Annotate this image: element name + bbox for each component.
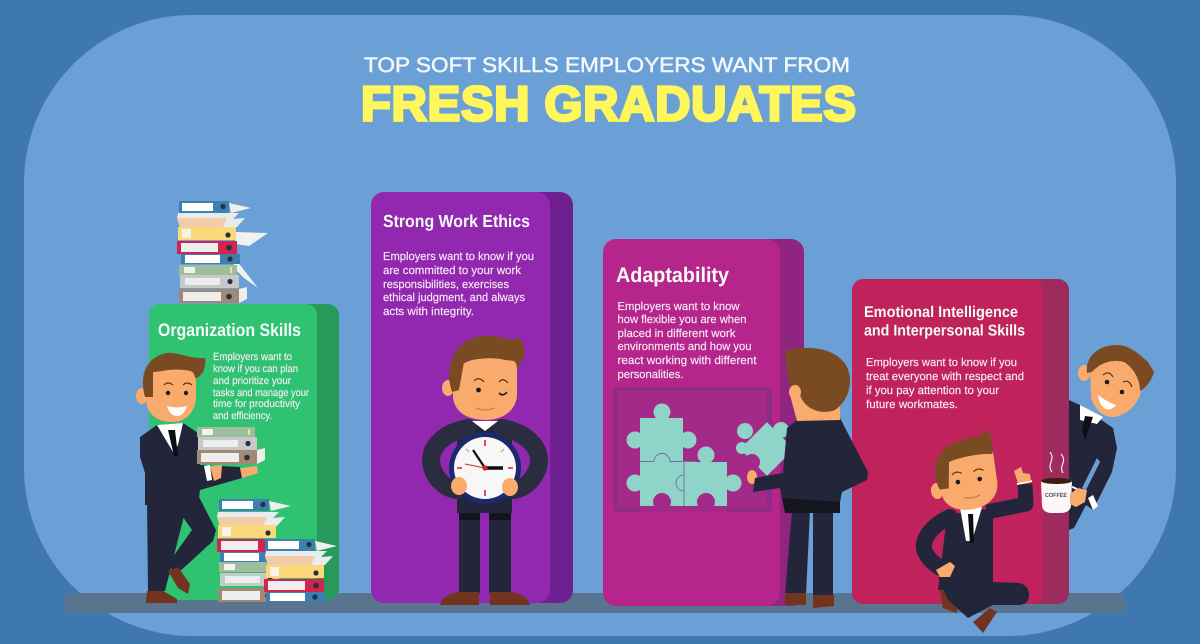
body text: react working with different	[618, 355, 757, 367]
icon: second floor binder stack	[264, 539, 337, 602]
icon: clock	[449, 432, 521, 504]
held binders	[197, 427, 265, 464]
icon: held puzzle piece	[736, 422, 794, 476]
panel front	[852, 279, 1043, 604]
body text: and prioritize your	[213, 375, 291, 387]
title	[361, 54, 856, 132]
body text: know if you can plan	[213, 363, 298, 375]
body text: and efficiency.	[213, 410, 272, 422]
heading: organization skills: Organization Skills	[158, 320, 301, 340]
ground shadow bar	[64, 593, 1126, 613]
body text: environments and how you	[618, 341, 752, 353]
man peeking from behind panel	[1069, 345, 1154, 530]
panel: emotional intelligence	[852, 279, 1069, 604]
panel side	[650, 239, 804, 606]
sitting man	[923, 428, 1087, 633]
heading: adaptability: Adaptability	[616, 264, 729, 287]
man holding clock	[431, 336, 539, 605]
body text	[213, 351, 309, 422]
icon: coffee cup	[1041, 452, 1087, 513]
heading: emotional intelligence: Emotional Intelligence	[864, 304, 1018, 321]
body text: are committed to your work	[383, 265, 521, 277]
icon: floor binder stack	[217, 499, 291, 602]
icon: puzzle pieces	[626, 404, 742, 506]
body text: ethical judgment, and always	[383, 292, 525, 304]
panel side	[420, 192, 573, 603]
title line 2: FRESH GRADUATES	[361, 78, 856, 132]
panel front	[371, 192, 550, 603]
body text: how flexible you are when	[618, 314, 746, 326]
body text: Employers want to	[213, 351, 292, 363]
man from behind holding puzzle piece	[747, 348, 868, 608]
body text: acts with integrity.	[383, 306, 474, 318]
heading: strong work ethics: Strong Work Ethics	[383, 211, 530, 231]
body text: Employers want to know if you	[383, 251, 534, 263]
man carrying binders	[136, 353, 265, 603]
panel front	[149, 304, 317, 600]
title line 1: TOP SOFT SKILLS EMPLOYERS WANT FROM	[364, 54, 850, 77]
puzzle display	[613, 387, 794, 512]
body text: time for productivity	[213, 398, 301, 410]
body text: treat everyone with respect and	[866, 371, 1024, 383]
body text: tasks and manage your	[213, 387, 309, 399]
body text	[383, 251, 534, 318]
icon: top binder stack	[177, 201, 268, 303]
hands on clock	[451, 477, 518, 496]
body text: future workmates.	[866, 399, 958, 411]
body text: placed in different work	[618, 328, 736, 340]
heading: emotional intelligence: and Interpersonal Skills	[864, 322, 1025, 340]
panel front	[603, 239, 780, 606]
panel side	[900, 279, 1069, 604]
panel: organization skills	[149, 304, 339, 600]
body text: Employers want to know	[618, 301, 740, 313]
panel: strong work ethics	[371, 192, 573, 603]
body text: if you pay attention to your	[866, 385, 999, 397]
heading: emotional intelligence	[864, 304, 1025, 340]
icon: coffee cup: COFFEE	[1045, 492, 1067, 499]
panel: adaptability	[603, 239, 804, 606]
panel side	[200, 304, 339, 600]
body text: personalities.	[618, 369, 684, 381]
body text	[618, 301, 757, 381]
body text: responsibilities, exercises	[383, 279, 509, 291]
body text: Employers want to know if you	[866, 357, 1017, 369]
body text	[866, 357, 1024, 411]
